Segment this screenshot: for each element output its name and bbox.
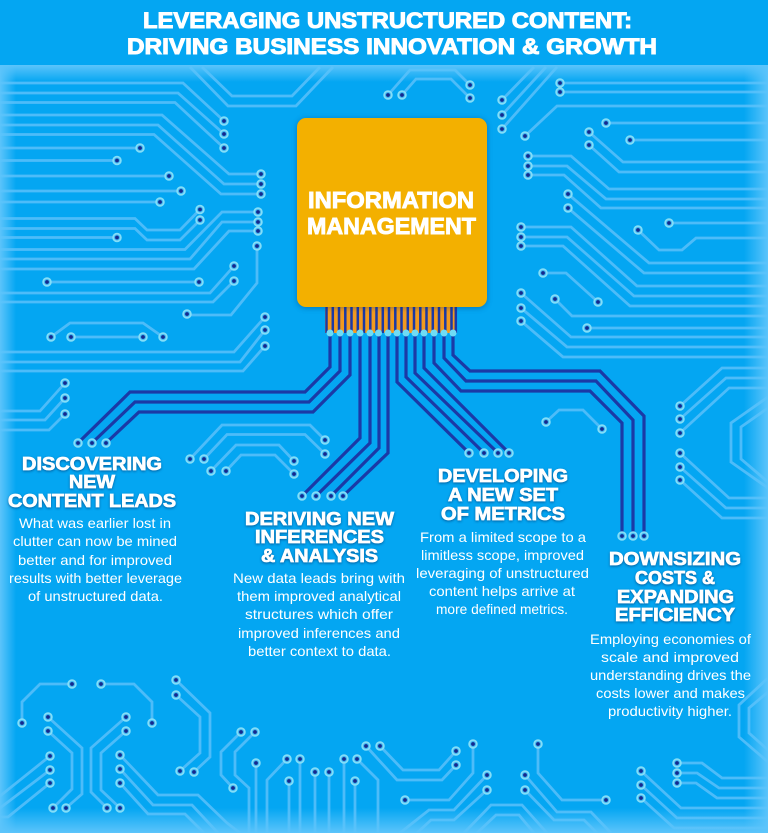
central chip: information management xyxy=(297,118,487,307)
section: developing a new set of metrics xyxy=(416,465,589,617)
chip pin pads xyxy=(326,330,456,336)
section: discovering new content leads xyxy=(8,453,182,604)
section: developing a new set of metrics: From a limited scope to a xyxy=(420,529,586,545)
section: developing a new set of metrics: content helps arrive at xyxy=(429,583,575,599)
section: developing a new set of metrics: DEVELOPING xyxy=(438,465,568,486)
dark blue traces from chip to discovering xyxy=(78,333,350,443)
section: deriving new inferences and analysis: structures which offer xyxy=(245,606,393,622)
section: developing a new set of metrics: OF METRICS xyxy=(441,503,565,524)
via pads xyxy=(22,83,680,808)
title xyxy=(0,0,768,65)
section: discovering new content leads: NEW xyxy=(69,471,116,492)
section: downsizing costs and expanding efficiency: DOWNSIZING xyxy=(609,548,741,569)
section: discovering new content leads: CONTENT LEADS xyxy=(8,490,176,511)
title: LEVERAGING UNSTRUCTURED CONTENT: xyxy=(143,8,632,33)
dark blue traces from chip to developing xyxy=(397,333,509,453)
section: discovering new content leads: of unstructured data. xyxy=(28,588,163,604)
section: discovering new content leads: What was earlier lost in xyxy=(19,515,171,531)
section: deriving new inferences and analysis: & ANALYSIS xyxy=(261,545,378,566)
section: downsizing costs and expanding efficiency: EXPANDING xyxy=(617,586,734,607)
circuit traces: top left xyxy=(0,83,265,430)
section: developing a new set of metrics: leveraging of unstructured xyxy=(416,565,589,581)
section: discovering new content leads: clutter can now be mined xyxy=(13,533,177,549)
section: deriving new inferences and analysis: improved inferences and xyxy=(238,625,400,641)
section: discovering new content leads: DISCOVERING xyxy=(22,453,162,474)
section: downsizing costs and expanding efficiency: EFFICIENCY xyxy=(615,604,736,625)
section: discovering new content leads: better and for improved xyxy=(18,552,172,568)
section: deriving new inferences and analysis: better context to data. xyxy=(248,643,391,659)
section: discovering new content leads: results with better leverage xyxy=(9,570,182,586)
section: downsizing costs and expanding efficiency: scale and improved xyxy=(601,649,739,665)
title: DRIVING BUSINESS INNOVATION & GROWTH xyxy=(127,34,657,59)
central chip: information management: INFORMATION xyxy=(308,187,474,213)
section: downsizing costs and expanding efficiency xyxy=(590,548,751,719)
circuit traces: bottom centre and right xyxy=(221,732,768,833)
section: deriving new inferences and analysis: DERIVING NEW xyxy=(245,508,395,529)
section: deriving new inferences and analysis: INFERENCES xyxy=(255,526,384,547)
section: developing a new set of metrics: A NEW SET xyxy=(448,484,559,505)
section: deriving new inferences and analysis: New data leads bring with xyxy=(233,570,405,586)
central chip: information management: MANAGEMENT xyxy=(307,213,476,239)
dark blue traces from chip to downsizing xyxy=(434,333,644,536)
circuit traces: top right xyxy=(502,67,768,762)
section: downsizing costs and expanding efficiency: understanding drives the xyxy=(590,667,751,683)
section: downsizing costs and expanding efficiency: costs lower and makes xyxy=(596,685,745,701)
section: developing a new set of metrics: limitless scope, improved xyxy=(421,547,584,563)
section: downsizing costs and expanding efficiency: COSTS & xyxy=(635,567,715,588)
dark blue traces from chip to deriving xyxy=(302,333,388,496)
chip pins: orange connector strip xyxy=(325,305,457,333)
section: developing a new set of metrics: more defined metrics. xyxy=(436,601,568,617)
section: downsizing costs and expanding efficiency: Employing economies of xyxy=(590,631,751,647)
circuit traces: bottom left xyxy=(0,680,240,833)
section: downsizing costs and expanding efficiency: productivity higher. xyxy=(608,703,732,719)
circuit traces: top centre xyxy=(190,67,470,474)
section: deriving new inferences and analysis xyxy=(233,508,405,659)
section: deriving new inferences and analysis: them improved analytical xyxy=(237,588,401,604)
